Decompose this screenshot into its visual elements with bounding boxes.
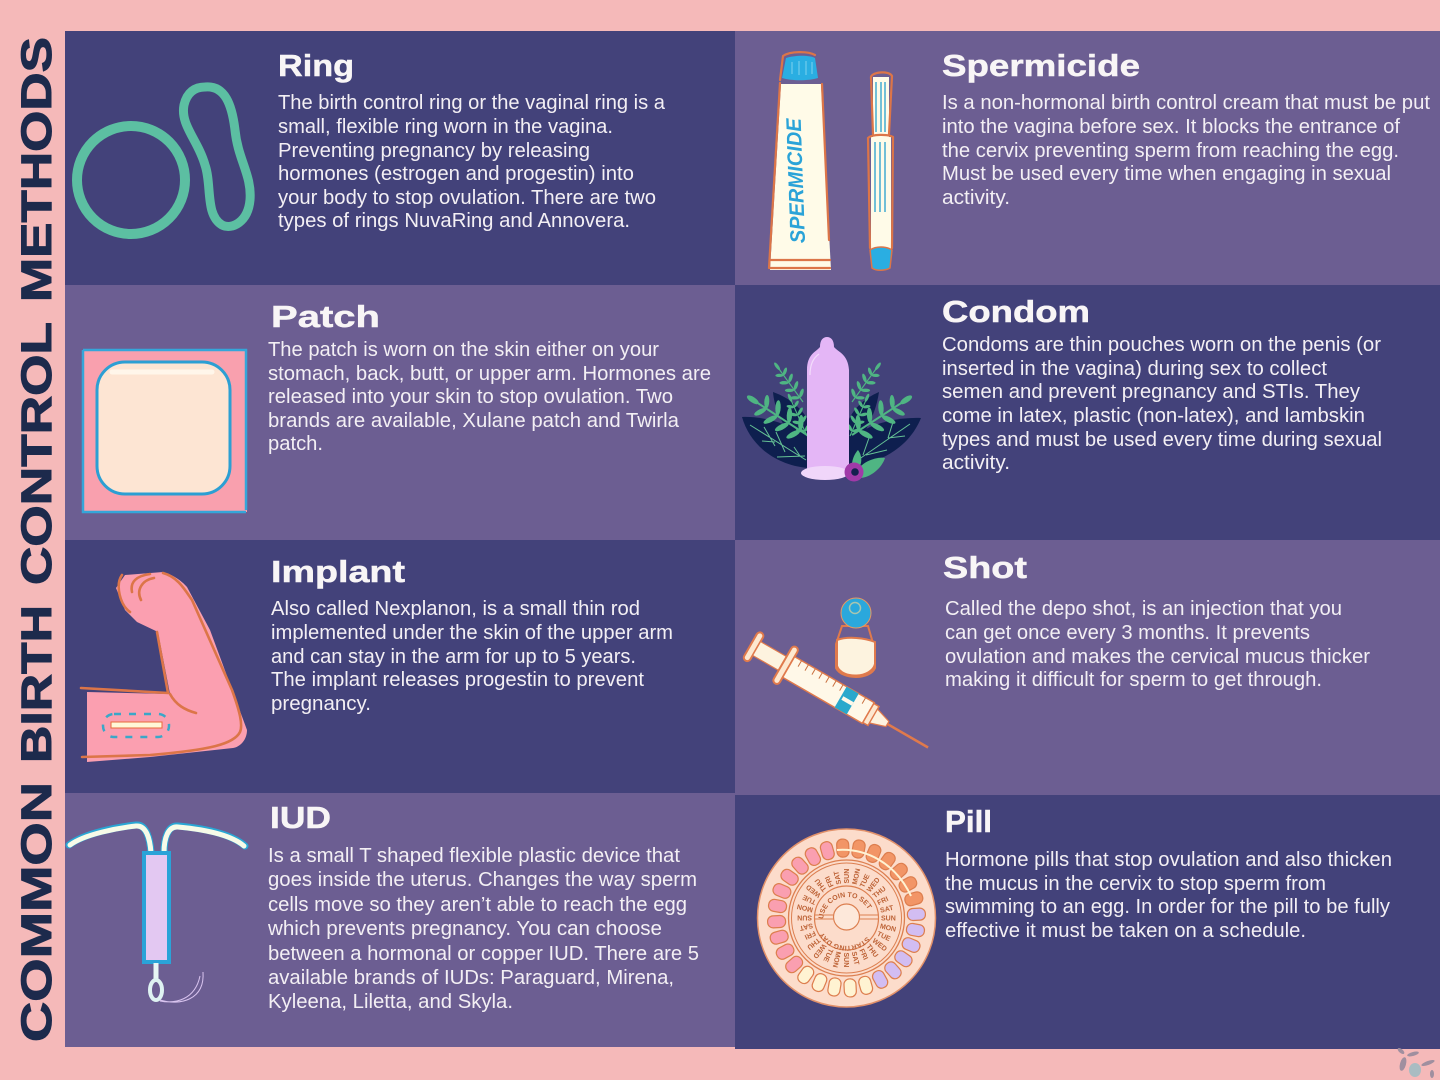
text block: condom [942, 334, 1382, 474]
text block: spermicide [942, 92, 1430, 209]
day labels: THU [814, 877, 828, 893]
day labels: FRI [857, 948, 869, 961]
text block: ring: small, flexible ring worn in the vagina. [278, 116, 613, 138]
text block: pill: Hormone pills that stop ovulation and also thicken [945, 849, 1392, 871]
day labels: WED [871, 938, 888, 953]
text block: implant: The implant releases progestin to prevent [271, 669, 644, 691]
icon: syringe [740, 627, 939, 766]
text block: spermicide: activity. [942, 187, 1010, 209]
icon: condom with leaves [739, 337, 921, 482]
heading: patch: Patch [271, 299, 380, 334]
text block: pill [945, 849, 1392, 942]
day labels: SUN [797, 914, 812, 920]
text block: condom: semen and prevent pregnancy and STIs. They [942, 381, 1360, 403]
text block: IUD: which prevents pregnancy. You can choose [267, 918, 662, 940]
arrow [837, 850, 911, 896]
center dial [815, 892, 878, 951]
text block: IUD [267, 845, 699, 1013]
day labels: MON [831, 951, 841, 968]
panel: IUD [65, 793, 735, 1047]
panel: condom [735, 285, 1440, 541]
text block: pill: swimming to an egg. In order for the pill to be fully [945, 896, 1390, 918]
icon: corner leaves [1397, 1047, 1435, 1078]
text block: spermicide: Must be used every time when engaging in sexual [942, 163, 1391, 185]
text block: condom: activity. [942, 452, 1010, 474]
panel: spermicide [735, 31, 1440, 286]
day labels: TUE [801, 893, 817, 905]
center dial: USE COIN TO SET [818, 892, 872, 918]
title: BIRTH [14, 605, 61, 763]
title [14, 37, 61, 1042]
text block: ring [278, 92, 666, 232]
text block: IUD: goes inside the uterus. Changes the way sperm [268, 869, 697, 891]
heading: implant: Implant [271, 554, 405, 589]
day labels: SAT [880, 905, 895, 915]
text block: pill: the mucus in the cervix to stop sperm from [945, 873, 1326, 895]
day labels: FRI [824, 875, 836, 888]
title: COMMON [14, 782, 61, 1042]
day labels: SUN [844, 869, 851, 884]
day labels: SAT [833, 870, 843, 885]
heading: IUD: IUD [270, 800, 331, 835]
icon: patch [83, 350, 247, 512]
text block: patch: The patch is worn on the skin either on your [268, 339, 659, 361]
text block: implant: pregnancy. [271, 693, 371, 715]
icon: spermicide tube [769, 52, 831, 270]
day labels: FRI [803, 929, 816, 940]
center dial: STARTING DAY [819, 934, 870, 951]
icon: vaginal ring [77, 87, 250, 234]
text block: condom: types and must be used every time during sexual [942, 429, 1382, 451]
day labels: TUE [876, 931, 892, 943]
text block: ring: The birth control ring or the vaginal ring is a [278, 92, 666, 114]
day labels: FRI [877, 896, 890, 907]
day labels: WED [811, 942, 827, 959]
text block: shot: Called the depo shot, is an injection that you [945, 598, 1342, 620]
text block: implant: implemented under the skin of the upper arm [271, 622, 673, 644]
panel: pill [735, 795, 1440, 1049]
text block: ring: hormones (estrogen and progestin) into [278, 163, 634, 185]
day labels: THU [865, 943, 879, 959]
text block: IUD: Kyleena, Liletta, and Skyla. [268, 991, 513, 1013]
heading: condom: Condom [942, 294, 1090, 329]
day labels: THU [805, 936, 821, 950]
text block: shot: making it difficult for sperm to get through. [945, 669, 1322, 691]
day labels: MON [796, 902, 814, 913]
text block: pill: effective it must be taken on a schedule. [945, 920, 1306, 942]
heading: spermicide: Spermicide [942, 48, 1140, 83]
icon: arm with implant [81, 572, 247, 762]
text block: IUD: cells move so they aren’t able to reach the egg [268, 894, 687, 916]
heading: pill: Pill [945, 804, 992, 839]
day labels: THU [872, 886, 888, 900]
text block: patch: patch. [268, 433, 323, 455]
day labels: SUN [881, 916, 896, 922]
text block: ring: types of rings NuvaRing and Annovera. [278, 210, 630, 232]
icon: pill pack [756, 828, 936, 1008]
icon: spermicide tube: SPERMICIDE [783, 117, 810, 244]
day labels: SUN [842, 952, 849, 967]
panel: patch [65, 285, 735, 541]
icon: applicator [868, 72, 893, 270]
day labels: WED [805, 883, 822, 898]
day labels: MON [852, 868, 862, 885]
day labels: TUE [859, 873, 872, 889]
text block: shot: can get once every 3 months. It prevents [945, 622, 1310, 644]
day labels: TUE [821, 947, 834, 963]
text block: condom: come in latex, plastic (non-latex), and lambskin [942, 405, 1365, 427]
text block: IUD: between a hormonal or copper IUD. There are 5 [268, 943, 699, 965]
day labels [796, 868, 897, 968]
text block: patch: stomach, back, butt, or upper arm. Hormones are [268, 363, 711, 385]
text block: shot: ovulation and makes the cervical mucus thicker [945, 646, 1370, 668]
text block: ring: your body to stop ovulation. There are two [278, 187, 656, 209]
text block: implant: Also called Nexplanon, is a small thin rod [271, 598, 640, 620]
title: METHODS [14, 37, 61, 302]
icon: IUD [69, 825, 245, 1002]
day labels: SAT [798, 921, 813, 931]
text block: implant [271, 598, 673, 715]
text block: patch: brands are available, Xulane patch and Twirla [268, 410, 680, 432]
panel: ring [65, 31, 735, 286]
text block: ring: Preventing pregnancy by releasing [278, 140, 590, 162]
pills [767, 839, 926, 997]
text block: patch: released into your skin to stop ovulation. Two [268, 386, 673, 408]
text block: spermicide: into the vagina before sex. It blocks the entrance of [942, 116, 1400, 138]
panel: implant [65, 540, 735, 794]
text block: condom: inserted in the vagina) during sex to collect [942, 358, 1327, 380]
text block: implant: and can stay in the arm for up to 5 years. [271, 646, 636, 668]
day labels: MON [879, 923, 897, 934]
icon: vial [836, 598, 875, 677]
text block: spermicide: the cervix preventing sperm from reaching the egg. [942, 140, 1399, 162]
title: CONTROL [14, 322, 61, 585]
text block: IUD: Is a small T shaped flexible plastic device that [268, 845, 680, 867]
text block: condom: Condoms are thin pouches worn on the penis (or [942, 334, 1381, 356]
text block: patch [268, 339, 711, 455]
heading: shot: Shot [943, 550, 1027, 585]
text block: spermicide: Is a non-hormonal birth control cream that must be put [942, 92, 1430, 114]
panel: shot [735, 540, 1440, 796]
text block: shot [945, 598, 1370, 691]
day labels: WED [866, 877, 882, 894]
day labels: SAT [850, 951, 860, 966]
text block: IUD: available brands of IUDs: Paraguard, Mirena, [268, 967, 674, 989]
heading: ring: Ring [278, 48, 354, 83]
